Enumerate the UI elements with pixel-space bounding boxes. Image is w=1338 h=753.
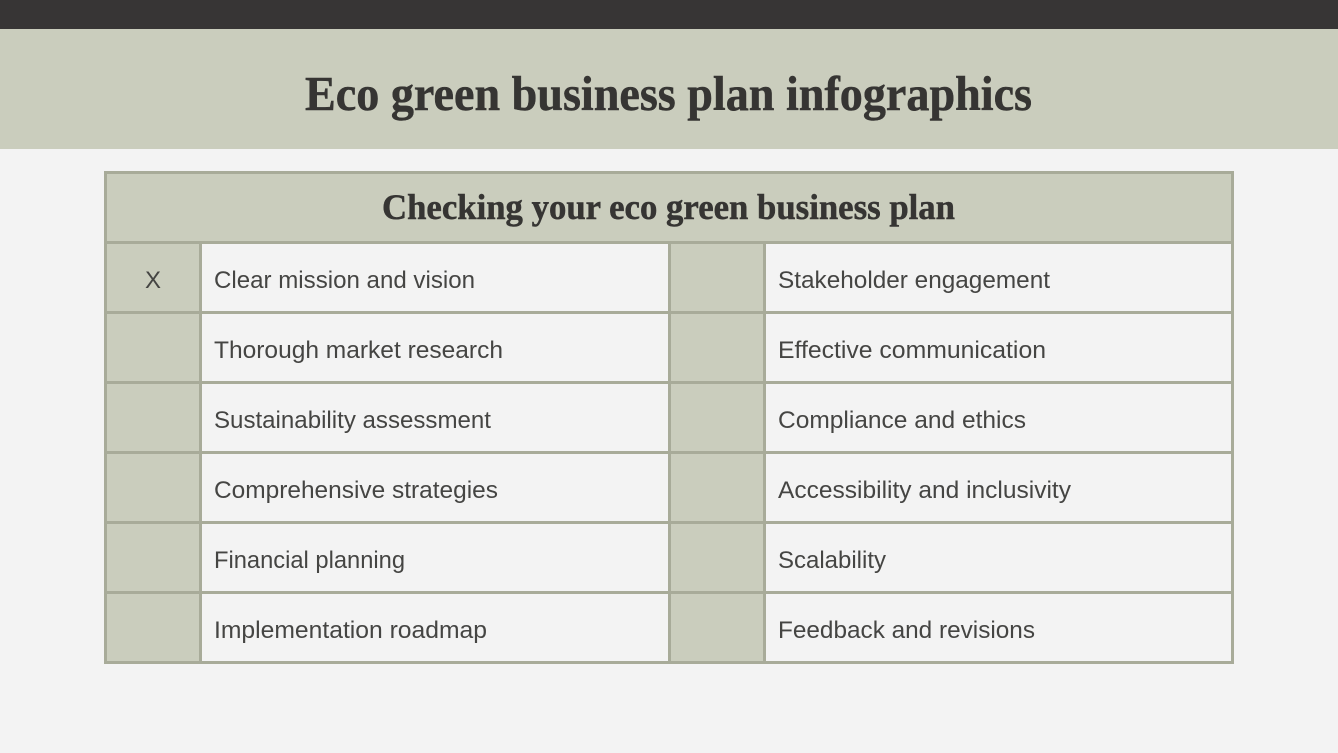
table heading: Checking your eco green business plan	[382, 187, 955, 227]
left items: Clear mission and vision	[214, 267, 475, 294]
check mark X: X	[145, 267, 161, 294]
left checkbox column	[105, 242, 201, 663]
left items: Implementation roadmap	[214, 617, 487, 644]
checklist table	[104, 171, 1234, 664]
top dark bar	[0, 0, 1338, 29]
right checkbox column	[669, 242, 765, 663]
left items: Sustainability assessment	[214, 407, 491, 434]
header band	[0, 29, 1338, 149]
table header cell	[105, 172, 1233, 242]
right items: Compliance and ethics	[778, 407, 1026, 434]
right items: Accessibility and inclusivity	[778, 477, 1071, 504]
right items	[778, 267, 1071, 644]
left items: Comprehensive strategies	[214, 477, 498, 504]
left items: Thorough market research	[214, 337, 503, 364]
left items: Financial planning	[214, 547, 405, 574]
right items: Stakeholder engagement	[778, 267, 1050, 294]
right items: Effective communication	[778, 337, 1046, 364]
right items: Scalability	[778, 547, 886, 574]
left items	[214, 267, 503, 644]
title: Eco green business plan infographics	[305, 66, 1032, 121]
right items: Feedback and revisions	[778, 617, 1035, 644]
